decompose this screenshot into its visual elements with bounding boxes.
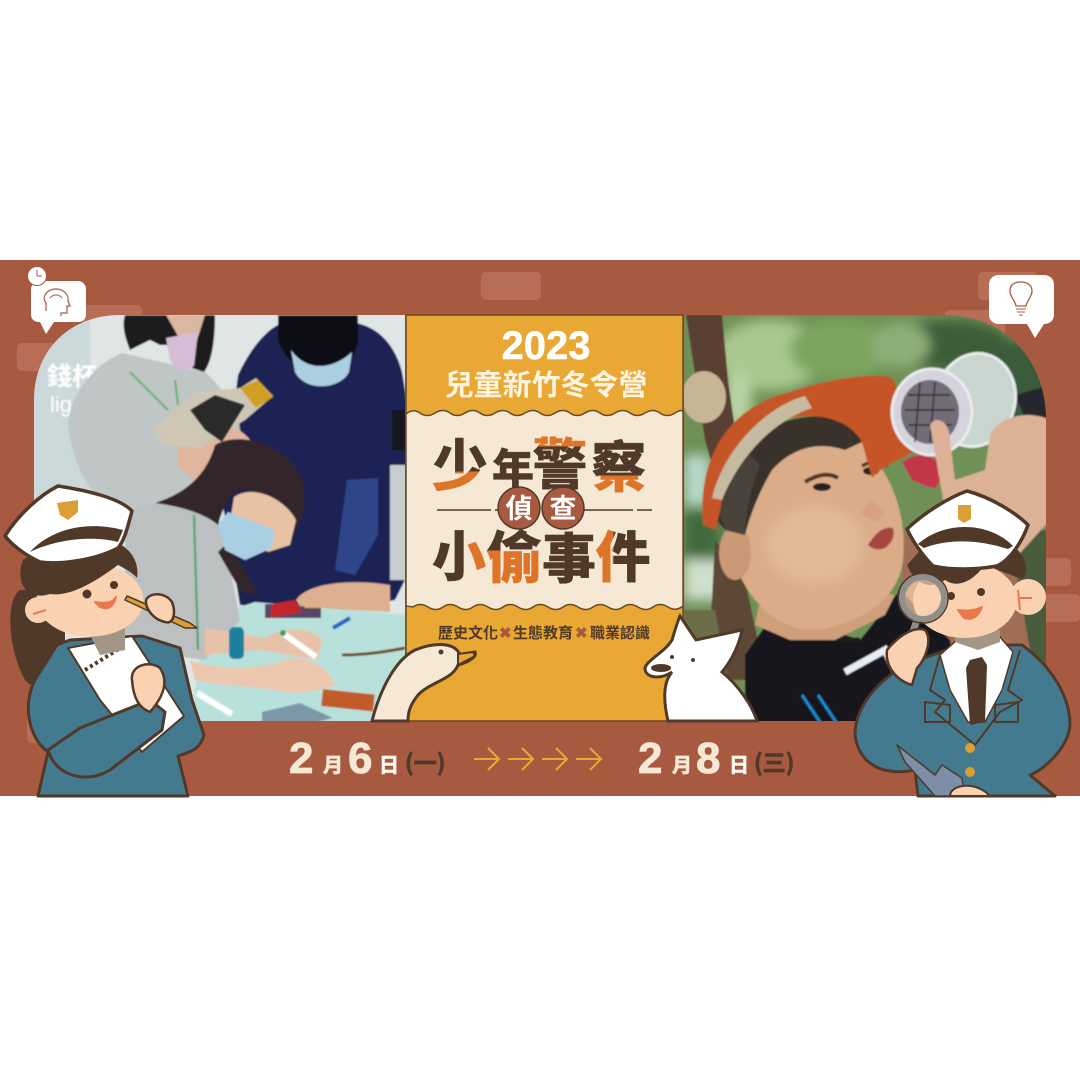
- face: [37, 564, 143, 636]
- main title line one: 少: [432, 422, 488, 503]
- main title line one: 警: [532, 420, 588, 500]
- subtitle themes: ✖: [575, 622, 588, 643]
- forearm: [48, 700, 165, 777]
- start date: 2: [289, 734, 313, 783]
- divider with detective badges: 查: [550, 487, 576, 526]
- main title line one: 年: [492, 436, 534, 497]
- dog illustration: [645, 616, 757, 721]
- notebook: [68, 636, 184, 752]
- hair back: [10, 590, 65, 688]
- arrows: [474, 748, 601, 770]
- girl reading book: [68, 315, 273, 515]
- photo: boy looking at jar: [682, 315, 1055, 725]
- end date: 月: [672, 749, 692, 778]
- neck: [955, 630, 1000, 650]
- pencil and hand: [125, 596, 197, 628]
- lower hand: [132, 664, 164, 712]
- jacket: [855, 645, 1070, 796]
- subtitle themes: 職業認識: [590, 622, 650, 643]
- main title line two: [432, 513, 651, 595]
- end date: 8: [696, 734, 720, 783]
- subtitle themes: [438, 622, 650, 643]
- divider with detective badges: 偵: [506, 487, 532, 526]
- divider with detective badges: [437, 487, 652, 529]
- subtitle themes: 生態教育: [513, 622, 573, 643]
- front hair: [20, 540, 137, 596]
- central title panel: [406, 315, 683, 721]
- table: [190, 602, 410, 725]
- hand: [887, 629, 928, 685]
- main title line two: 偷: [486, 514, 542, 595]
- jacket: [28, 636, 204, 796]
- event year: 2023: [502, 324, 590, 368]
- main title line two: 小: [432, 513, 486, 592]
- start date: (一): [405, 744, 445, 778]
- walkie talkie: [897, 745, 965, 796]
- subtitle themes: ✖: [499, 622, 512, 643]
- end date: 日: [729, 749, 749, 778]
- start date: 日: [379, 749, 399, 778]
- face and ear: [913, 562, 1017, 638]
- shirt and tie: [940, 637, 1013, 722]
- boy shirt: [745, 590, 965, 725]
- main title line two: 件: [595, 513, 651, 593]
- police boy with magnifying glass: [855, 491, 1070, 796]
- photo: students working at table: [30, 310, 412, 726]
- date range: [289, 734, 794, 783]
- orange cap: [702, 376, 913, 530]
- lapels: [930, 650, 1022, 745]
- start date: 月: [323, 749, 343, 778]
- end date: [638, 734, 794, 783]
- icon: light bulb speech bubble: [989, 275, 1054, 338]
- police hat: [5, 486, 132, 563]
- girl drawing with marker: [125, 439, 390, 692]
- main title line one: 察: [591, 423, 647, 503]
- pockets and buttons: [925, 702, 1018, 722]
- back person and right side: [1016, 530, 1046, 664]
- jar and hand: [889, 350, 1046, 554]
- photo: students working at table: lig: [50, 392, 72, 417]
- icon: brain speech bubble with clock: [28, 266, 86, 334]
- police girl with notebook: [5, 486, 204, 796]
- end date: (三): [754, 744, 794, 778]
- goose illustration: [372, 645, 475, 721]
- photo: students working at table: 錢杯: [47, 357, 97, 393]
- hair: [907, 545, 1026, 585]
- police hat: [907, 491, 1028, 569]
- boy in navy hoodie: [222, 315, 412, 612]
- boy face: [712, 417, 904, 640]
- magnifying glass: [902, 577, 944, 619]
- neck: [85, 625, 125, 655]
- start date: [289, 734, 445, 783]
- start date: 6: [348, 734, 372, 783]
- main title line one: [432, 420, 647, 503]
- main title line two: 事: [542, 515, 596, 594]
- subtitle themes: 歷史文化: [438, 622, 498, 643]
- end date: 2: [638, 734, 662, 783]
- event name: 兒童新竹冬令營: [444, 362, 648, 404]
